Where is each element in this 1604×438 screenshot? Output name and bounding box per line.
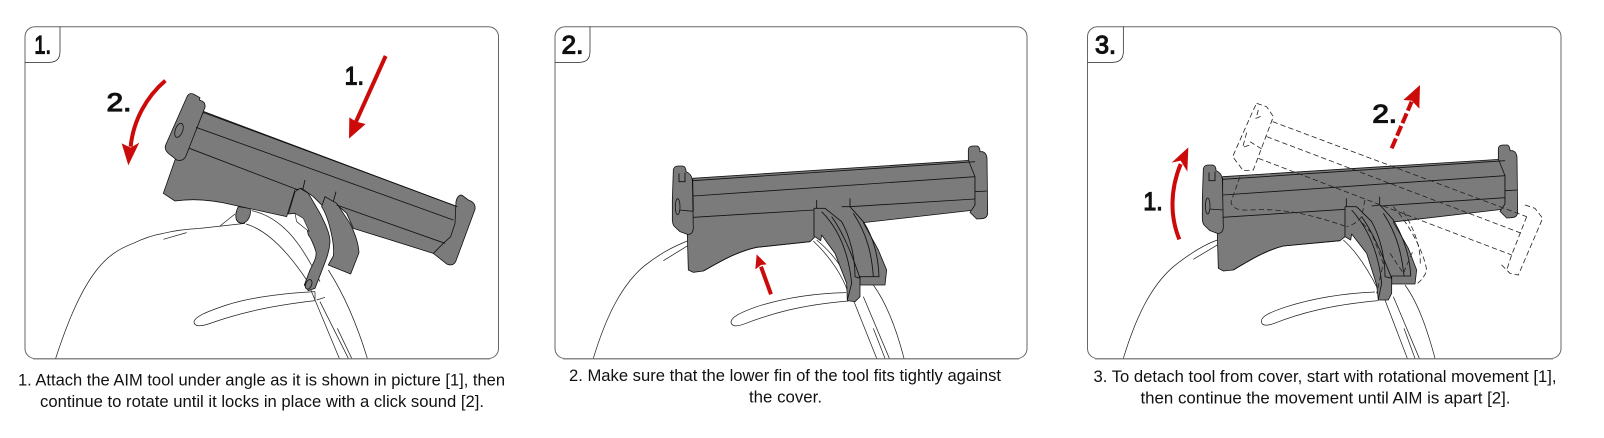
- panel: step 3: [1088, 27, 1561, 359]
- tool lug: [236, 207, 250, 223]
- label 1.: 1.: [1143, 188, 1163, 216]
- caption: step 2: [569, 367, 1001, 406]
- number tab: 2: 2.: [562, 32, 583, 60]
- label 1.: 1.: [345, 63, 364, 91]
- number tab: 1: [25, 27, 60, 62]
- helmet line art: [593, 240, 904, 358]
- arrow: contact point: [755, 254, 771, 294]
- label 2.: 2.: [107, 89, 131, 117]
- caption: step 3: 3. To detach tool from cover, start with rotational movement [1],: [1094, 368, 1556, 386]
- helmet line art: [1123, 240, 1435, 358]
- number tab: 1: 1.: [34, 32, 51, 60]
- caption: step 2: 2. Make sure that the lower fin of the tool fits tightly against: [569, 367, 1001, 385]
- caption: step 3: then continue the movement until AIM is apart [2].: [1140, 390, 1510, 408]
- arrow 2: curved: [122, 81, 165, 165]
- label 2.: 2.: [1372, 100, 1397, 128]
- arrow 1: curved up: [1172, 147, 1188, 239]
- AIM tool, angled: [163, 94, 475, 291]
- AIM tool, level: [1202, 145, 1518, 300]
- helmet line art: [56, 211, 367, 358]
- number tab: 3: [1088, 27, 1123, 62]
- arrow 1: straight: [349, 56, 386, 139]
- number tab: 2: [555, 27, 590, 62]
- caption: step 2: the cover.: [749, 388, 822, 406]
- caption: step 1: continue to rotate until it locks in place with a click sound [2].: [40, 393, 484, 411]
- caption: step 3: [1094, 368, 1556, 408]
- dashed ghost of tool position: [1231, 103, 1543, 293]
- number tab: 3: 3.: [1095, 32, 1116, 60]
- panel: step 1: [25, 27, 498, 359]
- AIM tool, level: [672, 146, 988, 302]
- arrow 2: dashed: [1392, 85, 1420, 148]
- caption: step 1: [18, 372, 505, 411]
- caption: step 1: 1. Attach the AIM tool under angle as it is shown in picture [1], then: [18, 372, 505, 390]
- panel: step 2: [555, 27, 1027, 359]
